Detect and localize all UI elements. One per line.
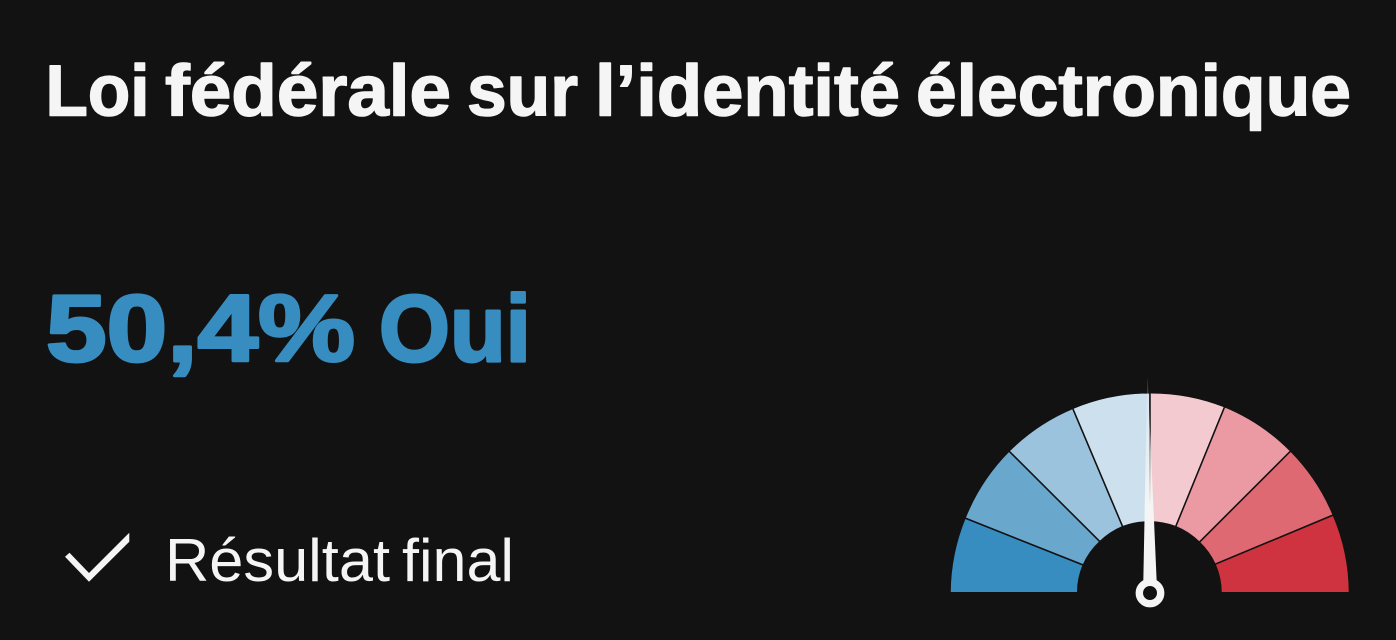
needle [1143, 379, 1157, 582]
result value: 50,4% Oui: Oui [379, 276, 531, 382]
gauge segments [950, 393, 1350, 593]
title: électronique [916, 52, 1351, 132]
gauge [950, 379, 1350, 604]
needle hub [1139, 582, 1161, 604]
title [46, 52, 1351, 132]
status label: Résultat final: Résultat [165, 527, 390, 594]
title: fédérale [165, 52, 451, 132]
icon: check mark [65, 533, 129, 582]
result value: 50,4% Oui: 50,4% [46, 276, 355, 382]
status label: Résultat final: final [402, 527, 514, 594]
title: l’identité [595, 52, 900, 132]
result value: 50,4% Oui [46, 276, 531, 382]
title: Loi [46, 52, 150, 132]
title: sur [467, 52, 578, 132]
status label: Résultat final [165, 527, 514, 594]
